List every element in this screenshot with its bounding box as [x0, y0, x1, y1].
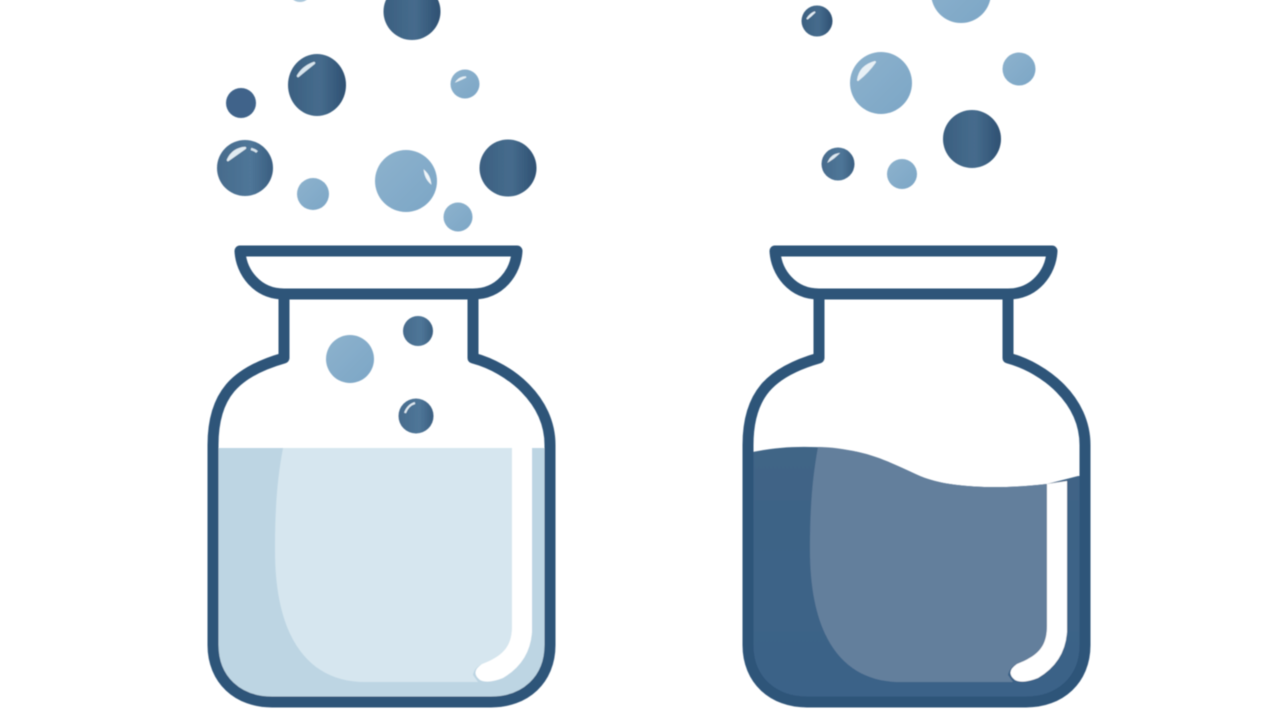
jar outline — [213, 251, 550, 702]
jar outline — [748, 251, 1085, 702]
dark water body — [752, 446, 1080, 698]
bubbles above right jar — [802, 0, 1036, 189]
illustration: two jars with rising bubbles — [206, 0, 1092, 708]
jar: left, pale water — [205, 251, 557, 708]
jar: right, dark water — [740, 251, 1095, 710]
bubbles above left jar — [217, 0, 536, 232]
pale water body — [218, 448, 546, 698]
bubbles inside jar — [326, 316, 434, 434]
